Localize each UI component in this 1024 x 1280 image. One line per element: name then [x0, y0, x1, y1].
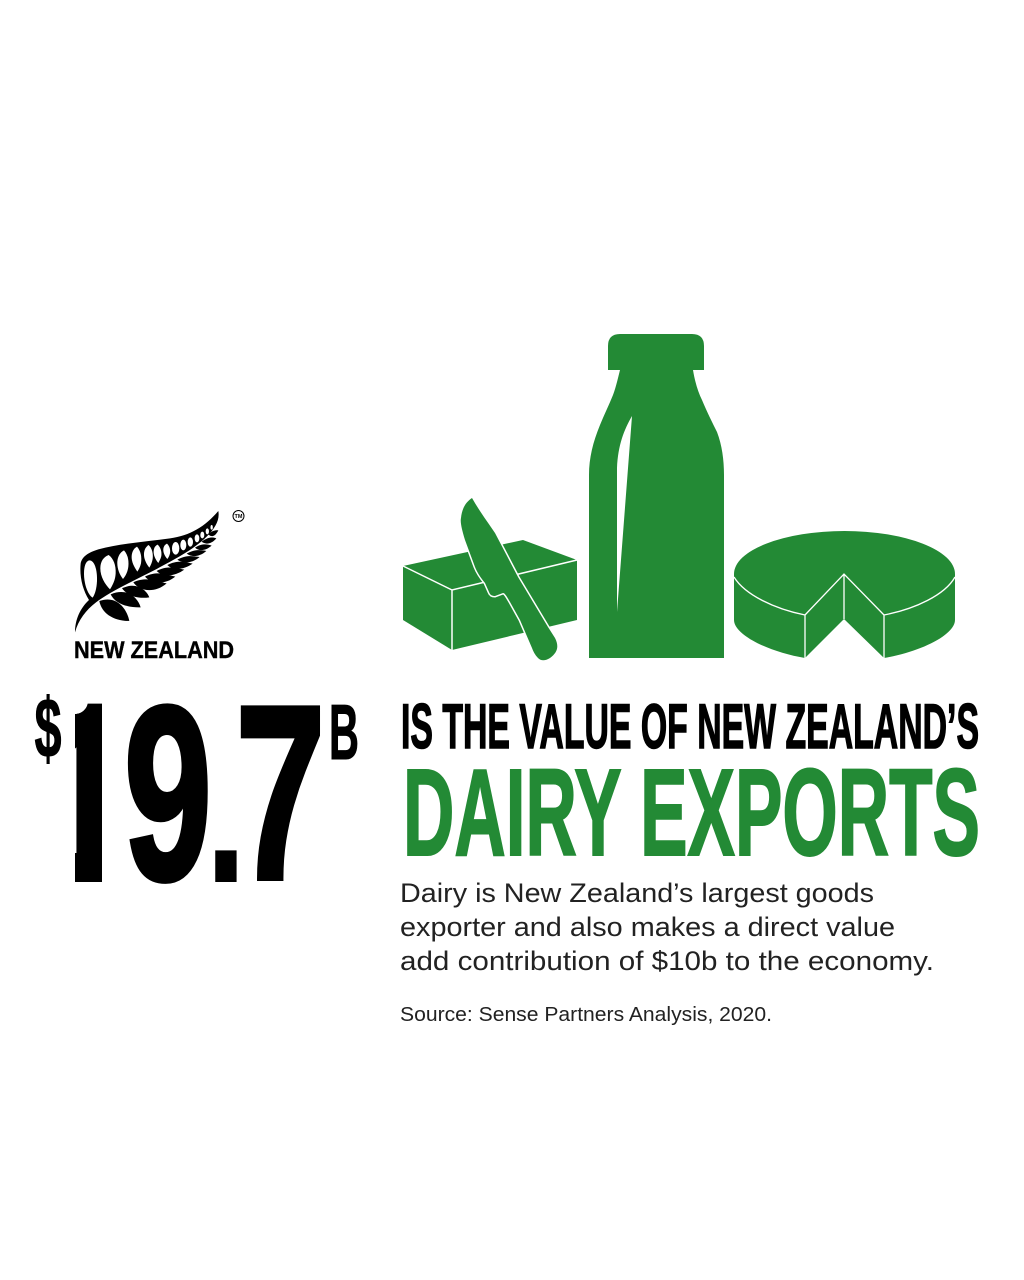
body text: add contribution of $10b to the economy.	[400, 946, 934, 976]
big number: $19.7B: .	[205, 690, 247, 927]
big number: $19.7B: 9	[124, 654, 212, 932]
body text: Dairy is New Zealand’s largest goods	[400, 878, 874, 908]
icon: butter and knife	[403, 498, 577, 660]
big number: $19.7B	[34, 694, 358, 884]
logo: New Zealand silver fern	[74, 510, 244, 664]
icon: cheese wheel	[734, 531, 955, 658]
icon: fern	[75, 511, 219, 632]
logo wordmark: NEW ZEALAND	[74, 637, 234, 664]
knife	[461, 498, 557, 660]
big number: $19.7B: 1	[38, 654, 138, 939]
body text: exporter and also makes a direct value	[400, 912, 895, 942]
source note: Source: Sense Partners Analysis, 2020.	[400, 1004, 772, 1026]
big number: $19.7B: $	[34, 681, 62, 775]
big number: $19.7B: B	[329, 688, 359, 776]
big number: $19.7B: 7	[236, 654, 326, 932]
icon: trademark	[233, 510, 244, 522]
icon: trademark: TM	[235, 514, 243, 520]
icon: milk bottle	[589, 334, 724, 658]
body text	[400, 878, 934, 976]
